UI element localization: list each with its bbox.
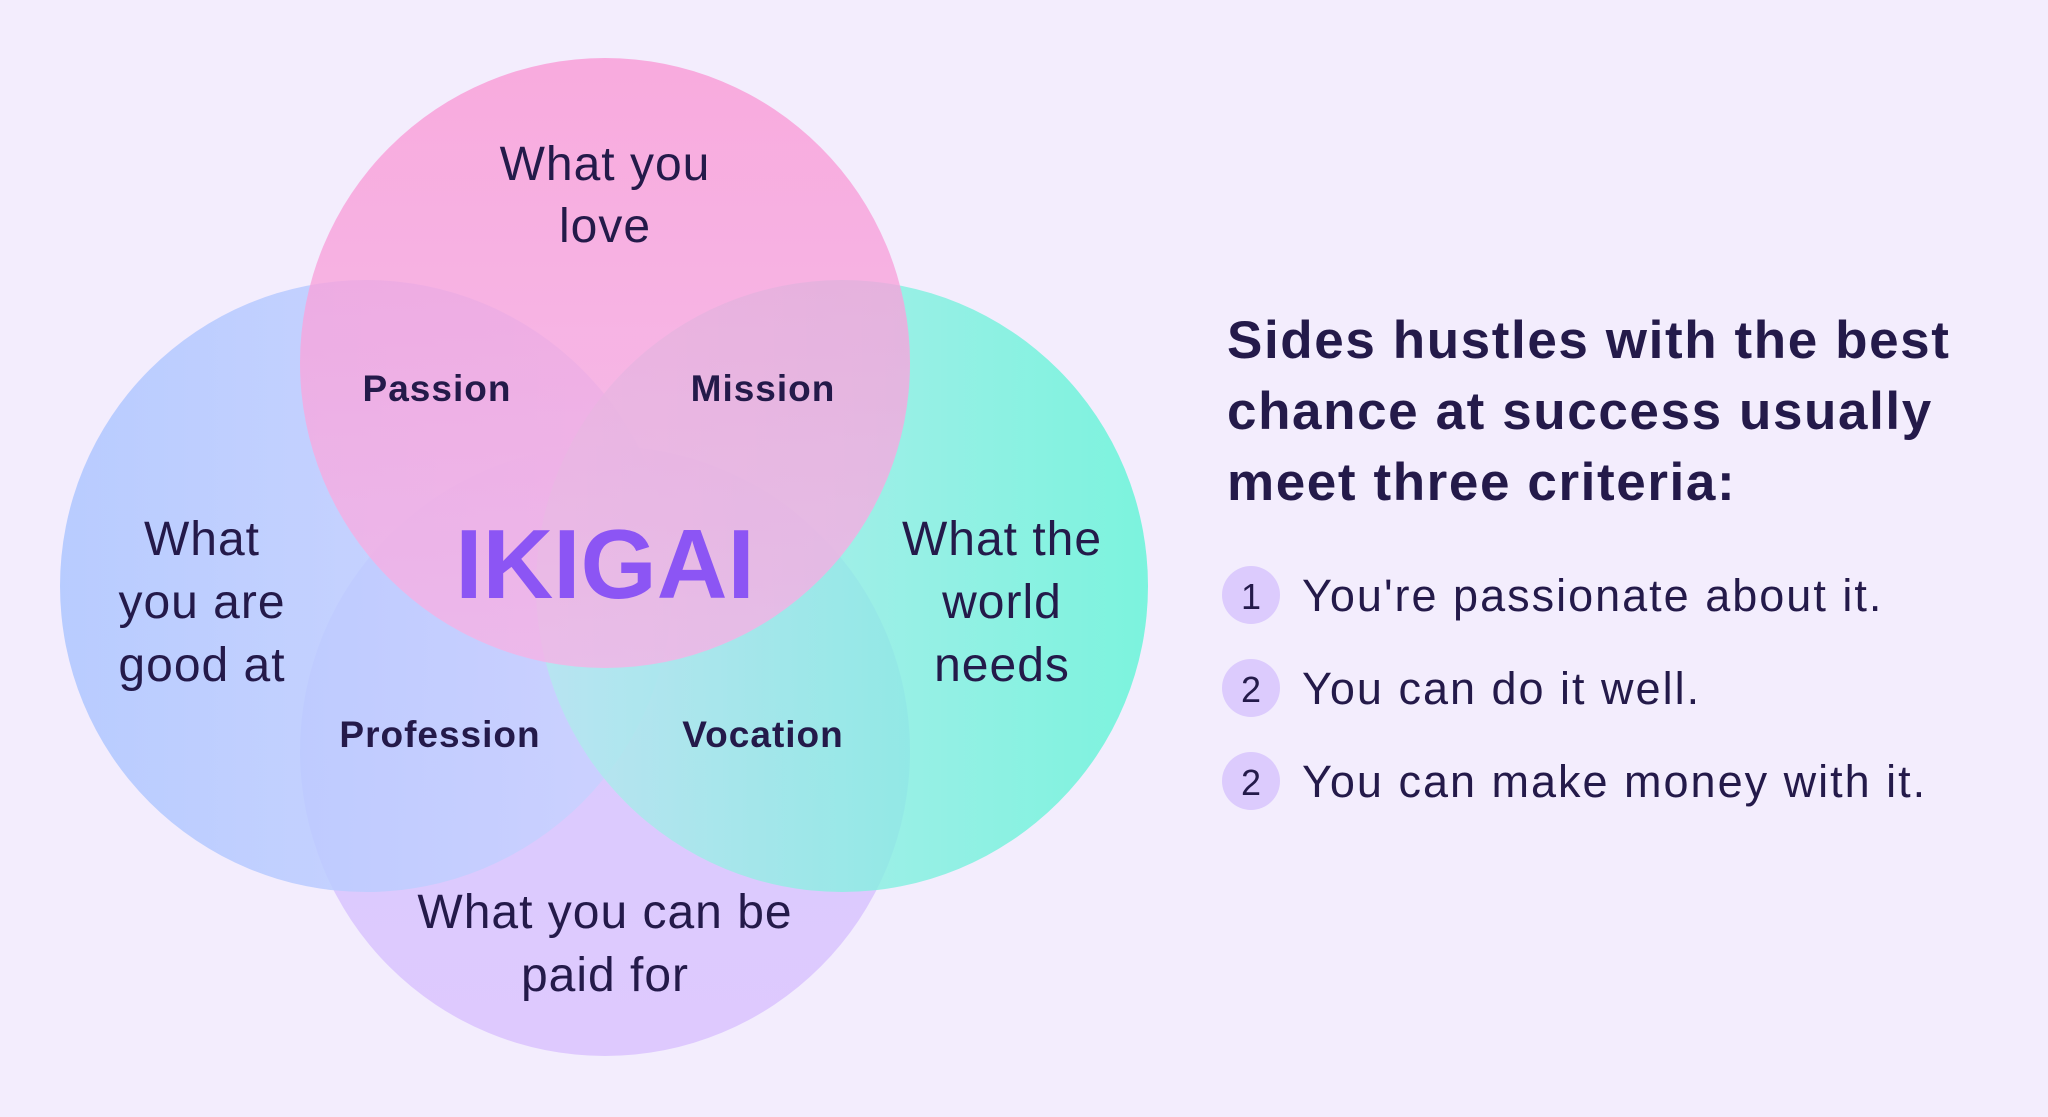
list item 3: 2	[1241, 762, 1261, 803]
label: vocation: Vocation	[682, 714, 844, 755]
label: mission: Mission	[691, 368, 835, 409]
list item 1: You're passionate about it.	[1302, 570, 1883, 621]
label: what you can be paid for: paid for	[521, 949, 689, 1002]
label: what you love: love	[559, 200, 651, 253]
heading: Sides hustles with the best	[1227, 311, 1951, 370]
list item 2: 2	[1241, 669, 1261, 710]
list item 3: You can make money with it.	[1302, 756, 1927, 807]
label: what the world needs: What the	[902, 513, 1102, 566]
circle: what you can be paid for	[300, 446, 910, 1056]
circle: what the world needs	[536, 280, 1148, 892]
label: what you are good at: What	[144, 513, 260, 566]
center title: ikigai: IKIGAI	[455, 509, 755, 619]
label: what the world needs: needs	[934, 639, 1070, 692]
list item 2: You can do it well.	[1302, 663, 1701, 714]
circle: what you love	[300, 58, 910, 668]
heading: chance at success usually	[1227, 382, 1933, 441]
label: what you love: What you	[500, 138, 710, 191]
label: profession: Profession	[339, 714, 541, 755]
label: what you are good at: good at	[118, 639, 286, 692]
label: what you can be paid for: What you can be	[417, 886, 793, 939]
list item 1: 1	[1241, 576, 1261, 617]
circle: what you are good at	[60, 280, 672, 892]
label: what the world needs: world	[941, 576, 1062, 629]
heading: meet three criteria:	[1227, 453, 1736, 512]
label: what you are good at: you are	[118, 576, 286, 629]
label: passion: Passion	[363, 368, 511, 409]
